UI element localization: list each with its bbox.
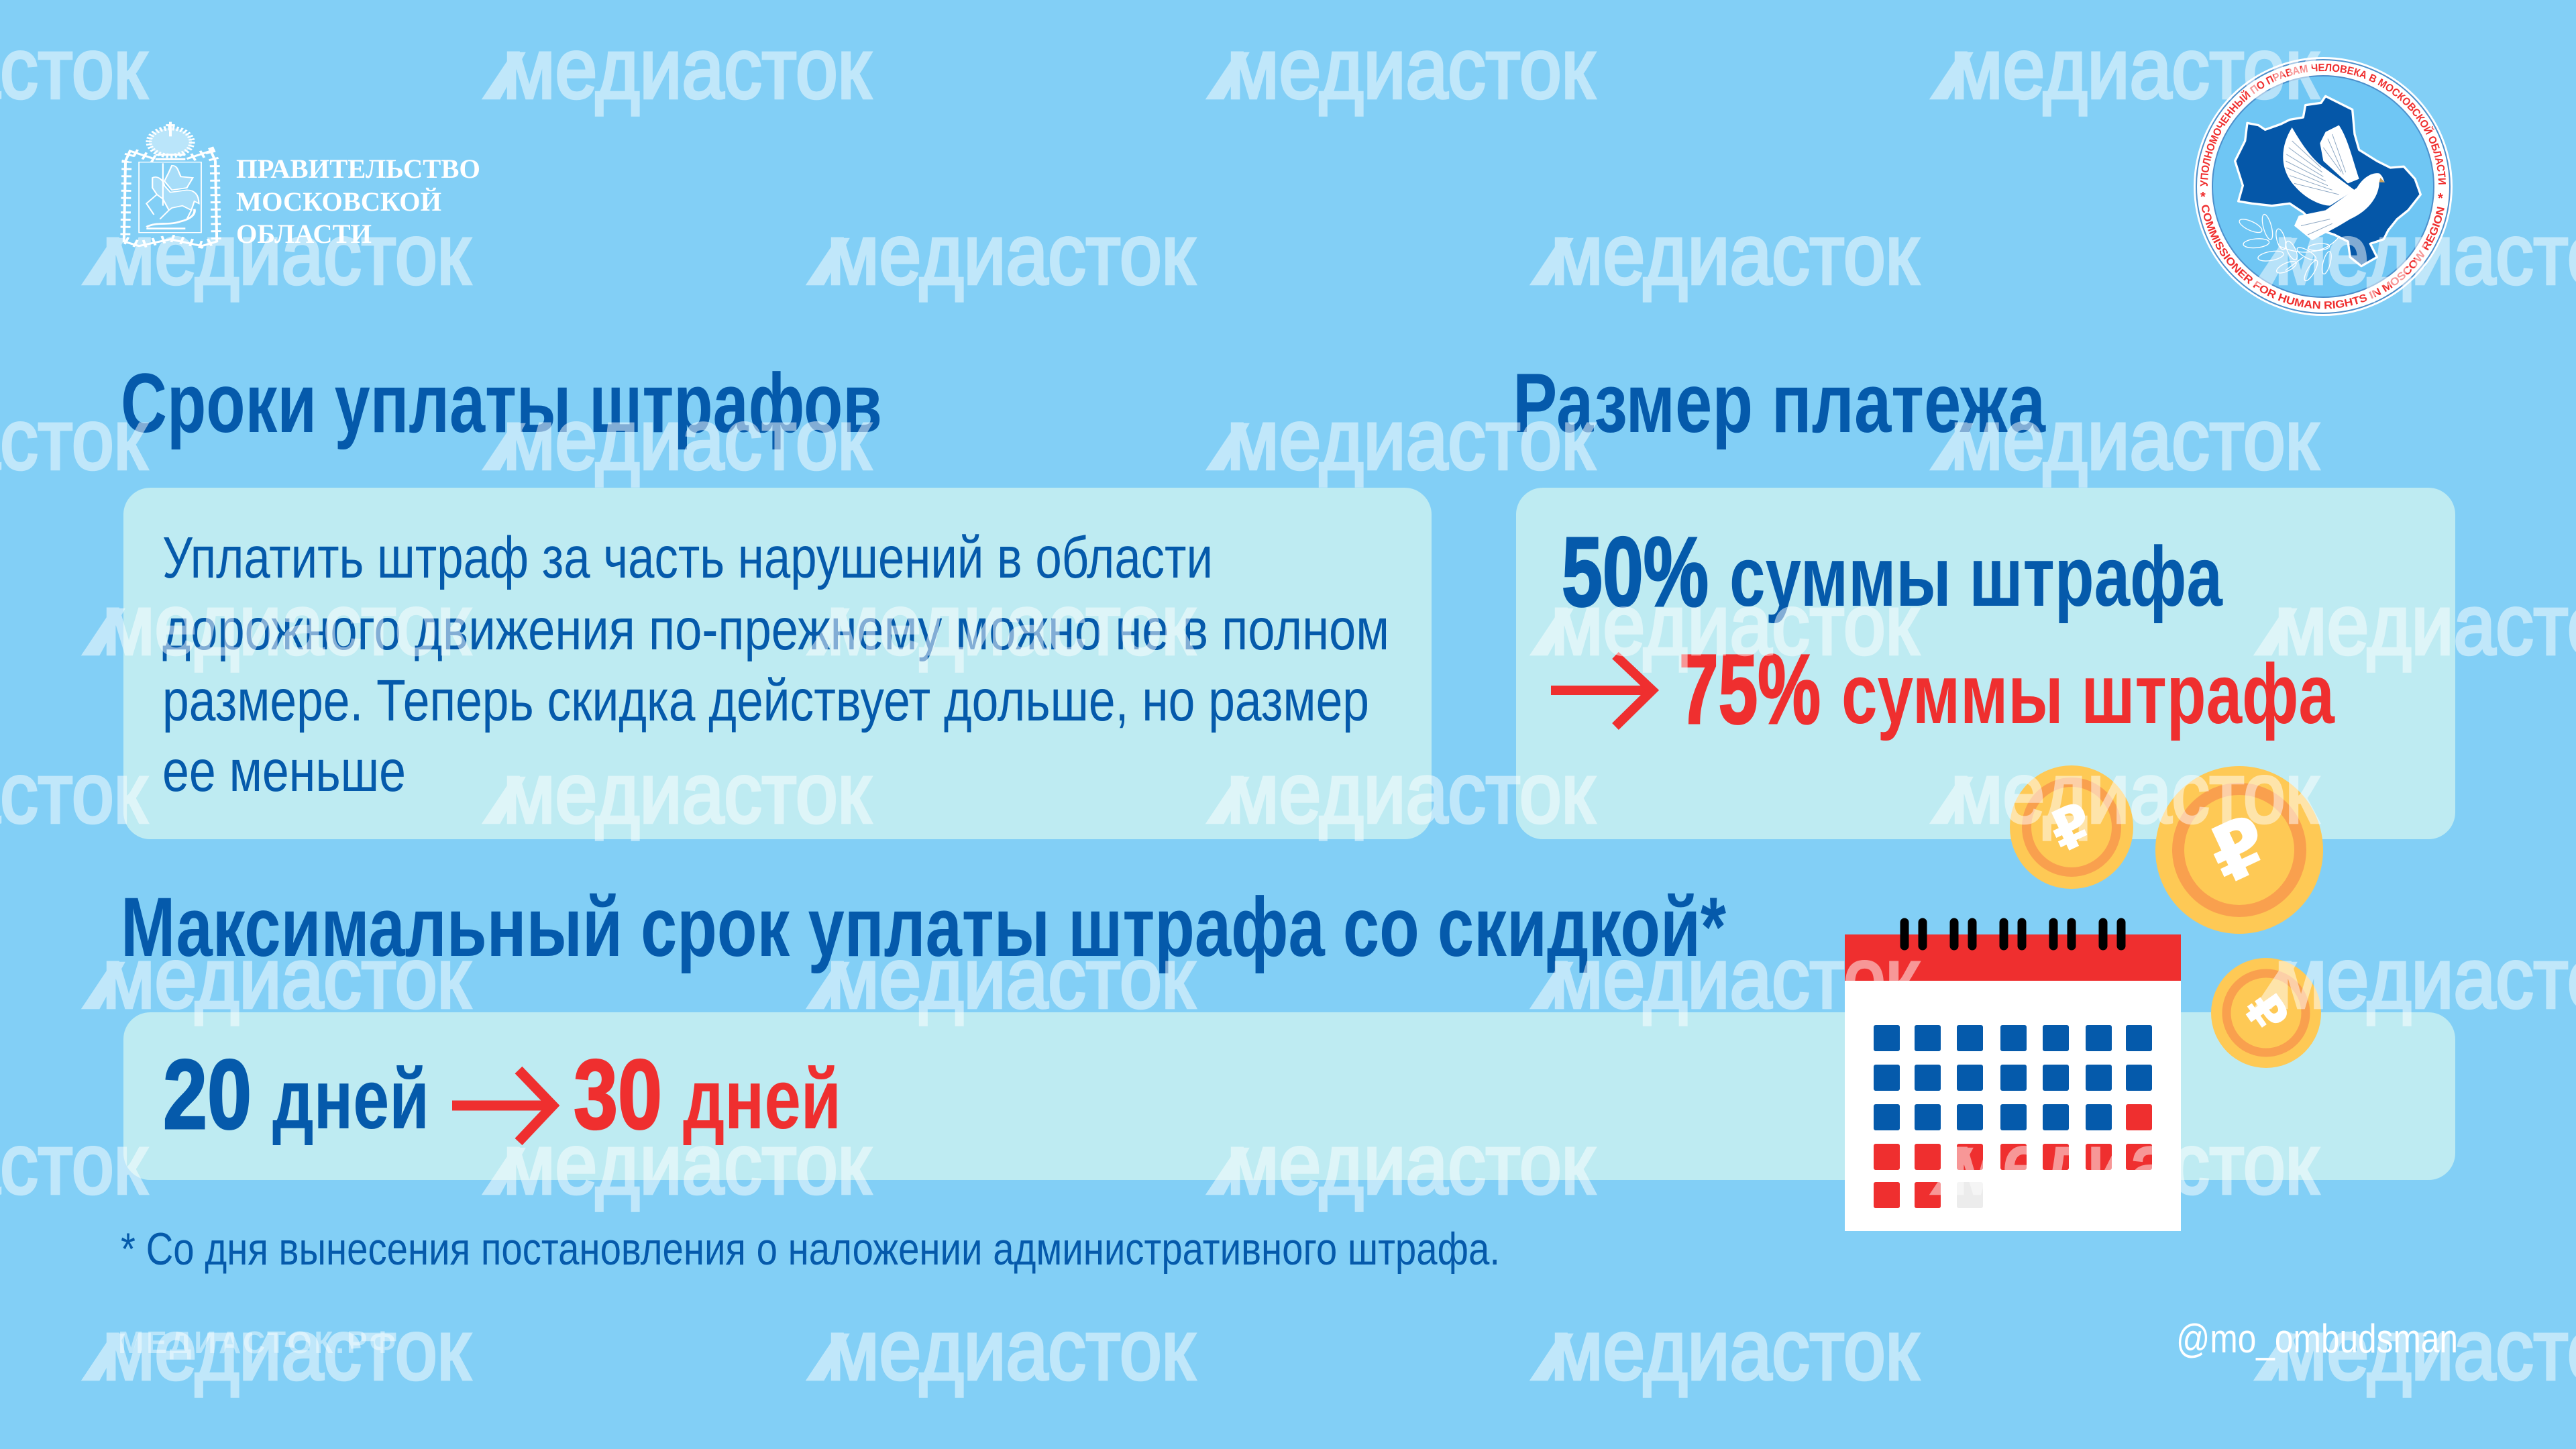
- old discount 50%: 50%: [1562, 517, 1709, 627]
- seal ring text: *: [2438, 191, 2443, 206]
- coin lower right: ₽: [2233, 982, 2300, 1044]
- watermark pattern: медиасток: [1227, 21, 1595, 116]
- watermark pattern: медиасток: [1951, 1116, 2319, 1212]
- seal ring text: УПОЛНОМОЧЕННЫЙ ПО ПРАВАМ ЧЕЛОВЕКА В МОСКОВСКОЙ ОБЛАСТИ: [2200, 64, 2446, 186]
- watermark pattern: медиасток: [503, 745, 871, 841]
- seal ring text: *: [2200, 190, 2206, 205]
- old discount 50%: [1562, 517, 2223, 627]
- watermark pattern: медиасток: [1551, 1302, 1919, 1397]
- icon: calendar: [1845, 922, 2181, 1231]
- watermark pattern: медиасток: [1227, 1116, 1595, 1212]
- new period: дней: [683, 1052, 841, 1146]
- icon: coat of arms: [124, 122, 217, 246]
- watermark pattern: медиасток: [1227, 392, 1595, 487]
- watermark pattern: медиасток: [827, 1302, 1195, 1397]
- body text: Уплатить штраф за часть нарушений в области: [162, 525, 1213, 590]
- watermark pattern: медиасток: [1951, 21, 2319, 116]
- logo: Moscow Region government: [124, 122, 480, 249]
- logo text: [236, 154, 480, 249]
- arrow: [1551, 655, 1652, 727]
- old period: 20: [163, 1040, 252, 1150]
- body text: ее меньше: [162, 739, 406, 804]
- watermark pattern: медиасток: [103, 1302, 471, 1397]
- coin large: [2155, 766, 2323, 934]
- watermark pattern: медиасток: [827, 207, 1195, 302]
- watermark pattern: медиасток: [827, 577, 1195, 672]
- coin large: ₽: [2196, 798, 2283, 902]
- watermark pattern: медиасток: [1227, 745, 1595, 841]
- logo text: ОБЛАСТИ: [236, 219, 372, 249]
- new period: [574, 1040, 841, 1150]
- watermark pattern: медиасток: [1951, 392, 2319, 487]
- icon: region map with dove: [2235, 96, 2420, 282]
- panel: payment terms: [123, 488, 1432, 839]
- panel: discount period: [123, 1012, 2455, 1180]
- new discount 75%: 75%: [1679, 635, 1821, 745]
- logo text: МОСКОВСКОЙ: [236, 186, 441, 217]
- arrow: [452, 1070, 553, 1142]
- heading: payment terms: Сроки уплаты штрафов: [121, 357, 882, 450]
- watermark pattern: медиасток: [1551, 577, 1919, 672]
- old period: дней: [272, 1052, 429, 1146]
- panel: payment size: [1516, 488, 2455, 839]
- body text: размере. Теперь скидка действует дольше, но размер: [162, 668, 1369, 733]
- watermark pattern: медиасток: [827, 930, 1195, 1026]
- site address: МЕДИАСТОК.РФ: [118, 1325, 396, 1360]
- logo: human rights commissioner seal: [2194, 57, 2453, 316]
- old discount 50%: суммы штрафа: [1729, 529, 2223, 624]
- social handle: @mo_ombudsman: [2176, 1316, 2458, 1361]
- new period: 30: [574, 1040, 662, 1150]
- watermark pattern: медиасток: [103, 577, 471, 672]
- body text: [162, 525, 1389, 804]
- old period: [163, 1040, 429, 1150]
- new discount 75%: суммы штрафа: [1841, 647, 2335, 741]
- heading: maximum discount period: Максимальный срок уплаты штрафа со скидкой*: [121, 881, 1726, 974]
- watermark pattern: медиасток: [503, 1116, 871, 1212]
- watermark pattern: медиасток: [103, 930, 471, 1026]
- icon: coins: [2010, 765, 2323, 1068]
- coin lower right: [2211, 958, 2321, 1068]
- coin small left: ₽: [2040, 790, 2104, 865]
- heading: payment size: Размер платежа: [1513, 357, 2046, 450]
- watermark pattern: медиасток: [103, 207, 471, 302]
- watermark pattern: медиасток: [503, 21, 871, 116]
- body text: дорожного движения по-прежнему можно не в полном: [162, 597, 1389, 662]
- footnote: * Со дня вынесения постановления о наложении административного штрафа.: [121, 1224, 1500, 1275]
- new discount 75%: [1679, 635, 2335, 745]
- coin small left: [2010, 765, 2133, 889]
- watermark pattern: медиасток: [1951, 745, 2319, 841]
- logo text: ПРАВИТЕЛЬСТВО: [236, 154, 480, 184]
- seal ring text: [2200, 64, 2446, 309]
- watermark pattern: медиасток: [1551, 930, 1919, 1026]
- seal ring text: COMMISSIONER FOR HUMAN RIGHTS IN MOSCOW REGION: [2202, 205, 2445, 309]
- watermark pattern: медиасток: [1551, 207, 1919, 302]
- watermark pattern: медиасток: [503, 392, 871, 487]
